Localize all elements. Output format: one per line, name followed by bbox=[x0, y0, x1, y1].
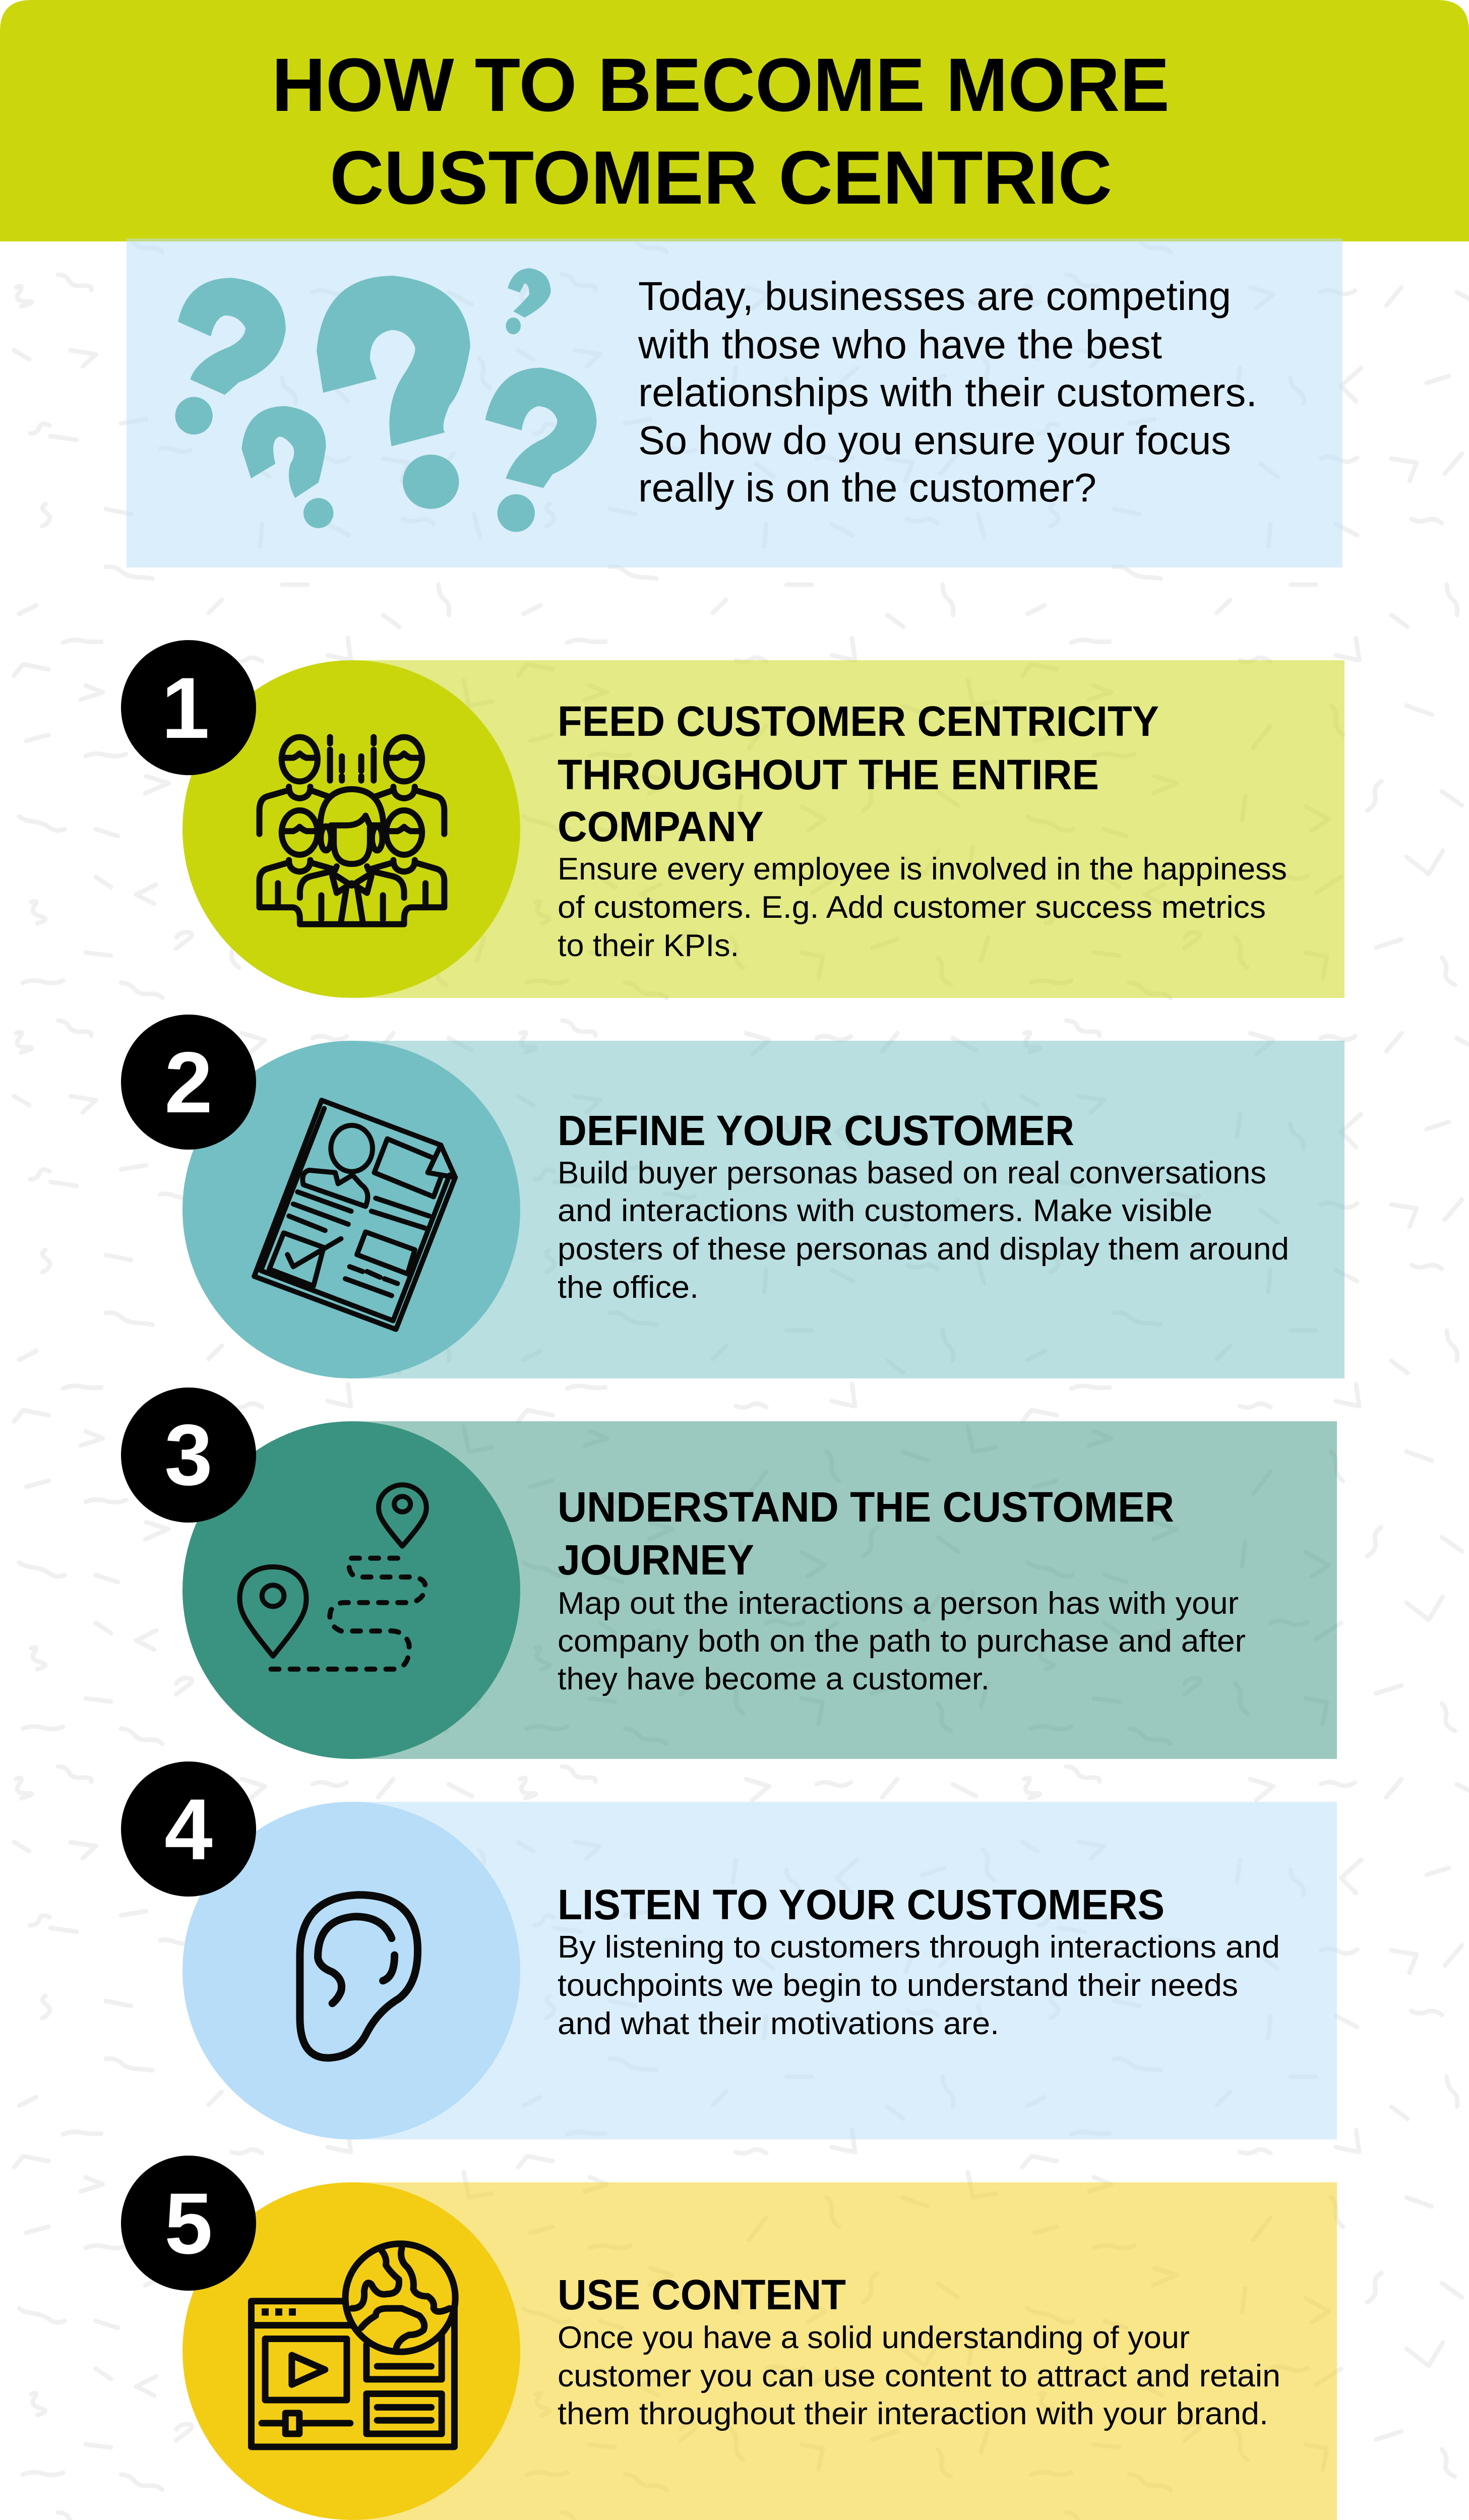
heading bbox=[558, 698, 1159, 850]
number badge: 1 bbox=[161, 660, 210, 757]
body text: and what their motivations are. bbox=[558, 2006, 999, 2041]
heading: COMPANY bbox=[558, 803, 764, 850]
number badge bbox=[121, 1761, 256, 1897]
body text bbox=[558, 1156, 1289, 1305]
number badge bbox=[121, 1015, 256, 1150]
icon: ear bbox=[300, 1895, 418, 2058]
step 5 bbox=[121, 2156, 1337, 2520]
step 2 bbox=[121, 1015, 1344, 1378]
panel: intro bbox=[127, 238, 1342, 568]
circle bbox=[182, 1802, 520, 2139]
intro text bbox=[638, 274, 1257, 510]
body text: touchpoints we begin to understand their needs bbox=[558, 1968, 1238, 2003]
intro text: really is on the customer? bbox=[638, 465, 1096, 510]
body text: Build buyer personas based on real conversations bbox=[558, 1156, 1266, 1190]
icon: persona document bbox=[254, 1100, 455, 1330]
heading: THROUGHOUT THE ENTIRE bbox=[558, 751, 1099, 798]
body text: Map out the interactions a person has with your bbox=[558, 1586, 1239, 1621]
number badge: 5 bbox=[164, 2175, 213, 2272]
body text bbox=[558, 1930, 1280, 2041]
circle bbox=[182, 2182, 520, 2520]
panel background bbox=[351, 1421, 1337, 1759]
body text: the office. bbox=[558, 1270, 699, 1305]
circle bbox=[182, 660, 520, 998]
step 1 bbox=[121, 640, 1344, 998]
icon: question marks bbox=[175, 268, 597, 532]
number badge bbox=[121, 640, 256, 775]
title: HOW TO BECOME MORE bbox=[272, 42, 1170, 127]
icon: web content and globe bbox=[251, 2244, 455, 2447]
intro text: relationships with their customers. bbox=[638, 370, 1257, 415]
step 3 bbox=[121, 1388, 1337, 1759]
panel background bbox=[351, 1802, 1337, 2139]
heading: JOURNEY bbox=[558, 1536, 754, 1584]
body text bbox=[558, 852, 1287, 963]
intro text: with those who have the best bbox=[638, 322, 1162, 367]
circle bbox=[182, 1421, 520, 1759]
panel background bbox=[351, 2182, 1337, 2520]
body text bbox=[558, 2320, 1280, 2431]
body text: they have become a customer. bbox=[558, 1662, 990, 1696]
circle bbox=[182, 1041, 520, 1378]
heading: FEED CUSTOMER CENTRICITY bbox=[558, 698, 1159, 745]
body text: and interactions with customers. Make visible bbox=[558, 1193, 1212, 1228]
body text: of customers. E.g. Add customer success metrics bbox=[558, 890, 1266, 925]
heading: UNDERSTAND THE CUSTOMER bbox=[558, 1483, 1174, 1531]
panel background bbox=[351, 660, 1344, 998]
icon: journey map pins bbox=[240, 1485, 426, 1669]
intro background bbox=[127, 238, 1342, 568]
body text: Once you have a solid understanding of your bbox=[558, 2320, 1190, 2355]
body text: Ensure every employee is involved in the happiness bbox=[558, 852, 1287, 887]
heading: LISTEN TO YOUR CUSTOMERS bbox=[558, 1881, 1165, 1928]
body text: company both on the path to purchase and after bbox=[558, 1624, 1246, 1659]
title: CUSTOMER CENTRIC bbox=[330, 135, 1112, 220]
body text: them throughout their interaction with your brand. bbox=[558, 2397, 1268, 2431]
title bbox=[272, 42, 1170, 220]
body text: customer you can use content to attract and retain bbox=[558, 2359, 1280, 2393]
icon: team of people bbox=[260, 737, 444, 924]
body text bbox=[558, 1586, 1246, 1696]
step 4 bbox=[121, 1761, 1337, 2139]
header banner bbox=[0, 0, 1469, 241]
body text: posters of these personas and display them around bbox=[558, 1232, 1289, 1267]
body text: By listening to customers through interactions and bbox=[558, 1930, 1280, 1965]
header background bbox=[0, 0, 1469, 241]
heading: USE CONTENT bbox=[558, 2271, 846, 2318]
number badge: 2 bbox=[164, 1034, 213, 1131]
panel background bbox=[351, 1041, 1344, 1378]
number badge bbox=[121, 1388, 256, 1523]
intro text: Today, businesses are competing bbox=[638, 274, 1231, 319]
number badge: 4 bbox=[164, 1781, 213, 1878]
number badge: 3 bbox=[164, 1407, 213, 1503]
intro text: So how do you ensure your focus bbox=[638, 418, 1231, 463]
body text: to their KPIs. bbox=[558, 928, 739, 963]
heading bbox=[558, 1483, 1174, 1584]
heading: DEFINE YOUR CUSTOMER bbox=[558, 1107, 1074, 1154]
number badge bbox=[121, 2156, 256, 2291]
